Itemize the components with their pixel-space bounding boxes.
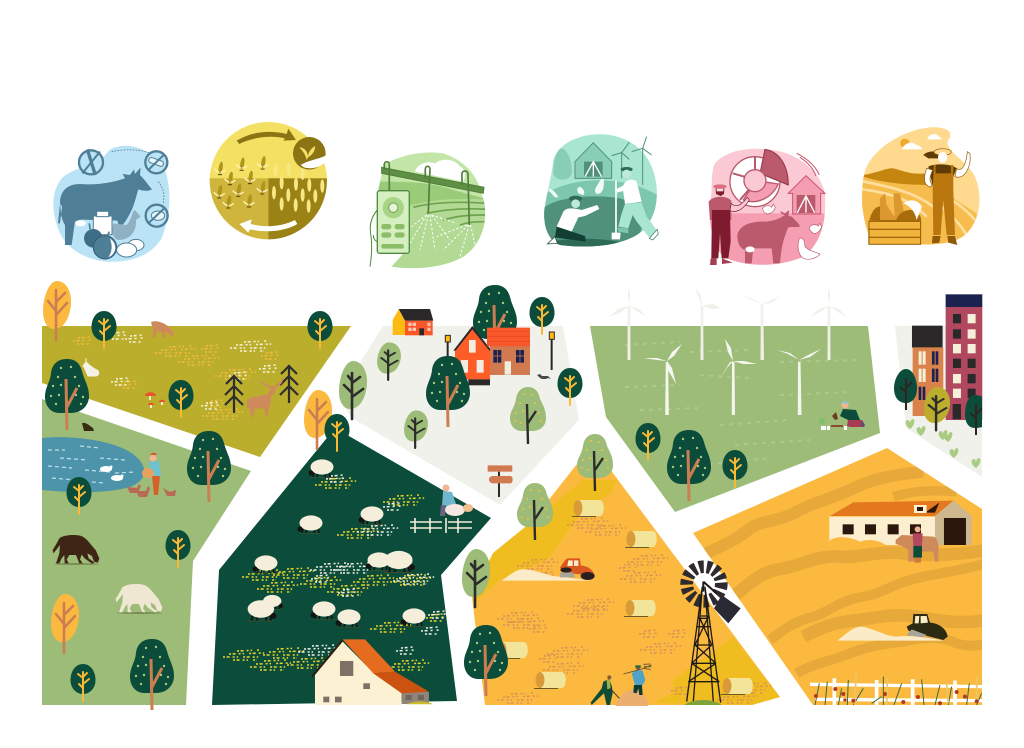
main red-orange house [453, 326, 492, 385]
farmer feeding chickens [142, 453, 161, 495]
hay field darker strip [473, 480, 780, 705]
green irrigated field [378, 152, 486, 268]
tree: light green large left of village [339, 361, 367, 419]
field: olive meadow [42, 326, 351, 457]
field: hay field [472, 445, 780, 705]
tree: small dark by house [530, 297, 554, 334]
windmill wheel [687, 567, 721, 601]
leaf marks on town ground [906, 419, 980, 468]
icon: blue food badge with cow [53, 146, 169, 262]
mushrooms [145, 392, 165, 408]
shepherd shearing [440, 484, 473, 516]
sun and clouds [900, 134, 942, 149]
wind turbines row back [609, 286, 847, 360]
pond [42, 437, 144, 492]
tree: light green hay field edge [462, 549, 490, 607]
tree: small dark top left [92, 311, 116, 348]
cow silhouette [58, 167, 152, 245]
tree: olive by town [924, 387, 950, 430]
kneeling farmer [547, 196, 599, 244]
background tree [553, 148, 572, 180]
blue blob background [53, 146, 169, 262]
tree: big dark behind house [473, 285, 517, 356]
farmer with cow [913, 526, 923, 563]
milk carton [93, 211, 112, 235]
young seedlings [549, 179, 604, 197]
worker with pitchfork [623, 664, 652, 695]
icon: pink livestock data badge [707, 147, 830, 270]
side annex [402, 692, 429, 704]
tree: small dark pasture right [166, 530, 190, 567]
street lamp right [549, 332, 554, 370]
street lamp left [445, 335, 450, 357]
windmill [684, 567, 741, 705]
worker bending [591, 675, 619, 705]
chickens [127, 484, 176, 497]
tree: small dark wind meadow right [722, 450, 748, 487]
crop circle segments [207, 120, 330, 242]
field: pale town ground [895, 326, 982, 477]
barn [575, 143, 612, 178]
windmill tower [687, 582, 721, 703]
lower roof [373, 672, 429, 693]
barn roof [830, 501, 953, 516]
tree: light green small [377, 342, 401, 380]
udder [75, 220, 86, 226]
field: light green pond pasture [42, 399, 251, 705]
barn windows [843, 524, 921, 534]
right row of wheat [272, 163, 324, 213]
frog [82, 423, 94, 431]
tree: small dark right of village [558, 368, 582, 405]
tree: small dark centre meadow [168, 380, 194, 417]
long barn with cattle [829, 501, 972, 563]
brown cow [896, 535, 939, 562]
tree: orange at pasture tip [304, 390, 332, 449]
hay bales [496, 500, 753, 694]
seedling in hand badge [293, 137, 327, 170]
crossed pill sign [145, 151, 167, 173]
crossed syringe sign [79, 149, 103, 175]
town: short brick building [912, 326, 943, 416]
dark brown horse [53, 535, 99, 565]
field: rolling stubble field [693, 448, 987, 705]
pink background [710, 148, 826, 265]
tree: big dark lower [130, 639, 174, 710]
cat [537, 374, 551, 379]
farmer in overalls [923, 149, 970, 245]
signpost [488, 465, 513, 497]
barn door [944, 518, 966, 545]
hay mound [616, 689, 648, 706]
tree: big dark wind meadow [667, 430, 711, 501]
hand outline [370, 210, 377, 267]
white fence and wildflowers [810, 673, 982, 705]
white rabbit [83, 358, 99, 376]
tree: orange lower left [51, 594, 79, 653]
tree: orange left top [43, 281, 71, 340]
irrigation boom [382, 162, 484, 225]
tree: dark by town right [965, 395, 982, 435]
crossed feed sign [146, 205, 168, 227]
infographic page [42, 122, 982, 710]
dormer [914, 503, 939, 513]
gable eave [312, 640, 343, 677]
upper roof [343, 639, 395, 673]
hen [112, 210, 141, 240]
field: wind farm meadow [590, 326, 880, 512]
small yellow and orange cottage [393, 309, 433, 335]
vegetables [869, 193, 922, 222]
tree: light green small lower [404, 410, 428, 448]
icon: teal sustainable farming badge [544, 134, 659, 246]
tree: big dark pasture [187, 431, 231, 502]
tree: big dark in front of house [426, 356, 470, 427]
barn [788, 176, 825, 214]
duck [798, 238, 820, 259]
bottom arrow [239, 219, 297, 233]
ducks on pond [100, 466, 124, 481]
eggs [117, 239, 144, 257]
orange landscape [862, 127, 980, 244]
tree: dark by town left [894, 369, 917, 410]
grass mound [407, 702, 433, 704]
top arrow [237, 129, 296, 144]
brick house with tiled roof [487, 328, 530, 375]
dashed arc accent [112, 150, 164, 203]
field rise in front of wall [829, 537, 887, 547]
tree: light green dotted village [510, 387, 546, 444]
tree: big dark left [45, 359, 89, 430]
wind turbines row front [643, 339, 821, 415]
field: pale village ground [338, 326, 579, 505]
barn wall [829, 517, 936, 545]
icon: orange harvest badge [862, 127, 980, 245]
pie chart [730, 149, 788, 207]
udder [745, 246, 755, 252]
stubble marks: hay field [497, 518, 772, 703]
farmer with tablet [709, 184, 749, 265]
tree: light green dotted hay apex [577, 434, 613, 491]
apples [84, 223, 117, 259]
tree: dark by wind meadow left [636, 423, 660, 460]
wind turbines [612, 137, 652, 185]
hay pile with orange tractor [502, 558, 595, 581]
teal landscape [544, 134, 657, 246]
tree: small dark by pond [66, 477, 92, 514]
tree: light green dotted hay left [517, 483, 553, 540]
white wooden fence [410, 518, 472, 533]
gardener planting seedlings [819, 401, 865, 430]
cream horse [116, 584, 162, 614]
white hens [763, 204, 822, 233]
smartphone [377, 191, 409, 253]
pine tree right [280, 365, 298, 403]
field: dark green sheep pasture [212, 428, 491, 705]
left row of young plants [214, 156, 268, 208]
barn gable [935, 501, 972, 545]
windmill tail vane [714, 595, 741, 623]
icon: yellow crop rotation badge [207, 120, 330, 242]
tree: small dark at pasture tip [324, 414, 350, 451]
motion arcs [797, 153, 819, 176]
cow [737, 210, 800, 263]
house wall [315, 642, 402, 705]
meadow flowers: olive field [73, 332, 280, 419]
icon: green irrigation phone badge [370, 152, 486, 268]
standing farmer with spade [612, 167, 658, 240]
workers with pitchforks and hay [591, 664, 652, 706]
texture dashes on wind farm meadow [625, 342, 860, 465]
tree: small dark lower left [70, 664, 96, 701]
dark tractor on hay pile [837, 614, 948, 641]
windmill base grass [684, 700, 722, 705]
meadow flowers: sheep field [223, 475, 447, 670]
farmhouse with orange roof [312, 639, 433, 705]
tree: small dark top right [308, 311, 332, 348]
tree: big dark hay field [464, 625, 508, 696]
deer grazing at top [151, 321, 174, 338]
sheep flock [247, 459, 426, 628]
wooden crate [869, 221, 921, 244]
house windows [323, 661, 370, 702]
town: tall magenta tower [946, 294, 982, 420]
annex windows [406, 695, 424, 700]
pine tree left [225, 375, 243, 413]
stag [247, 376, 284, 417]
